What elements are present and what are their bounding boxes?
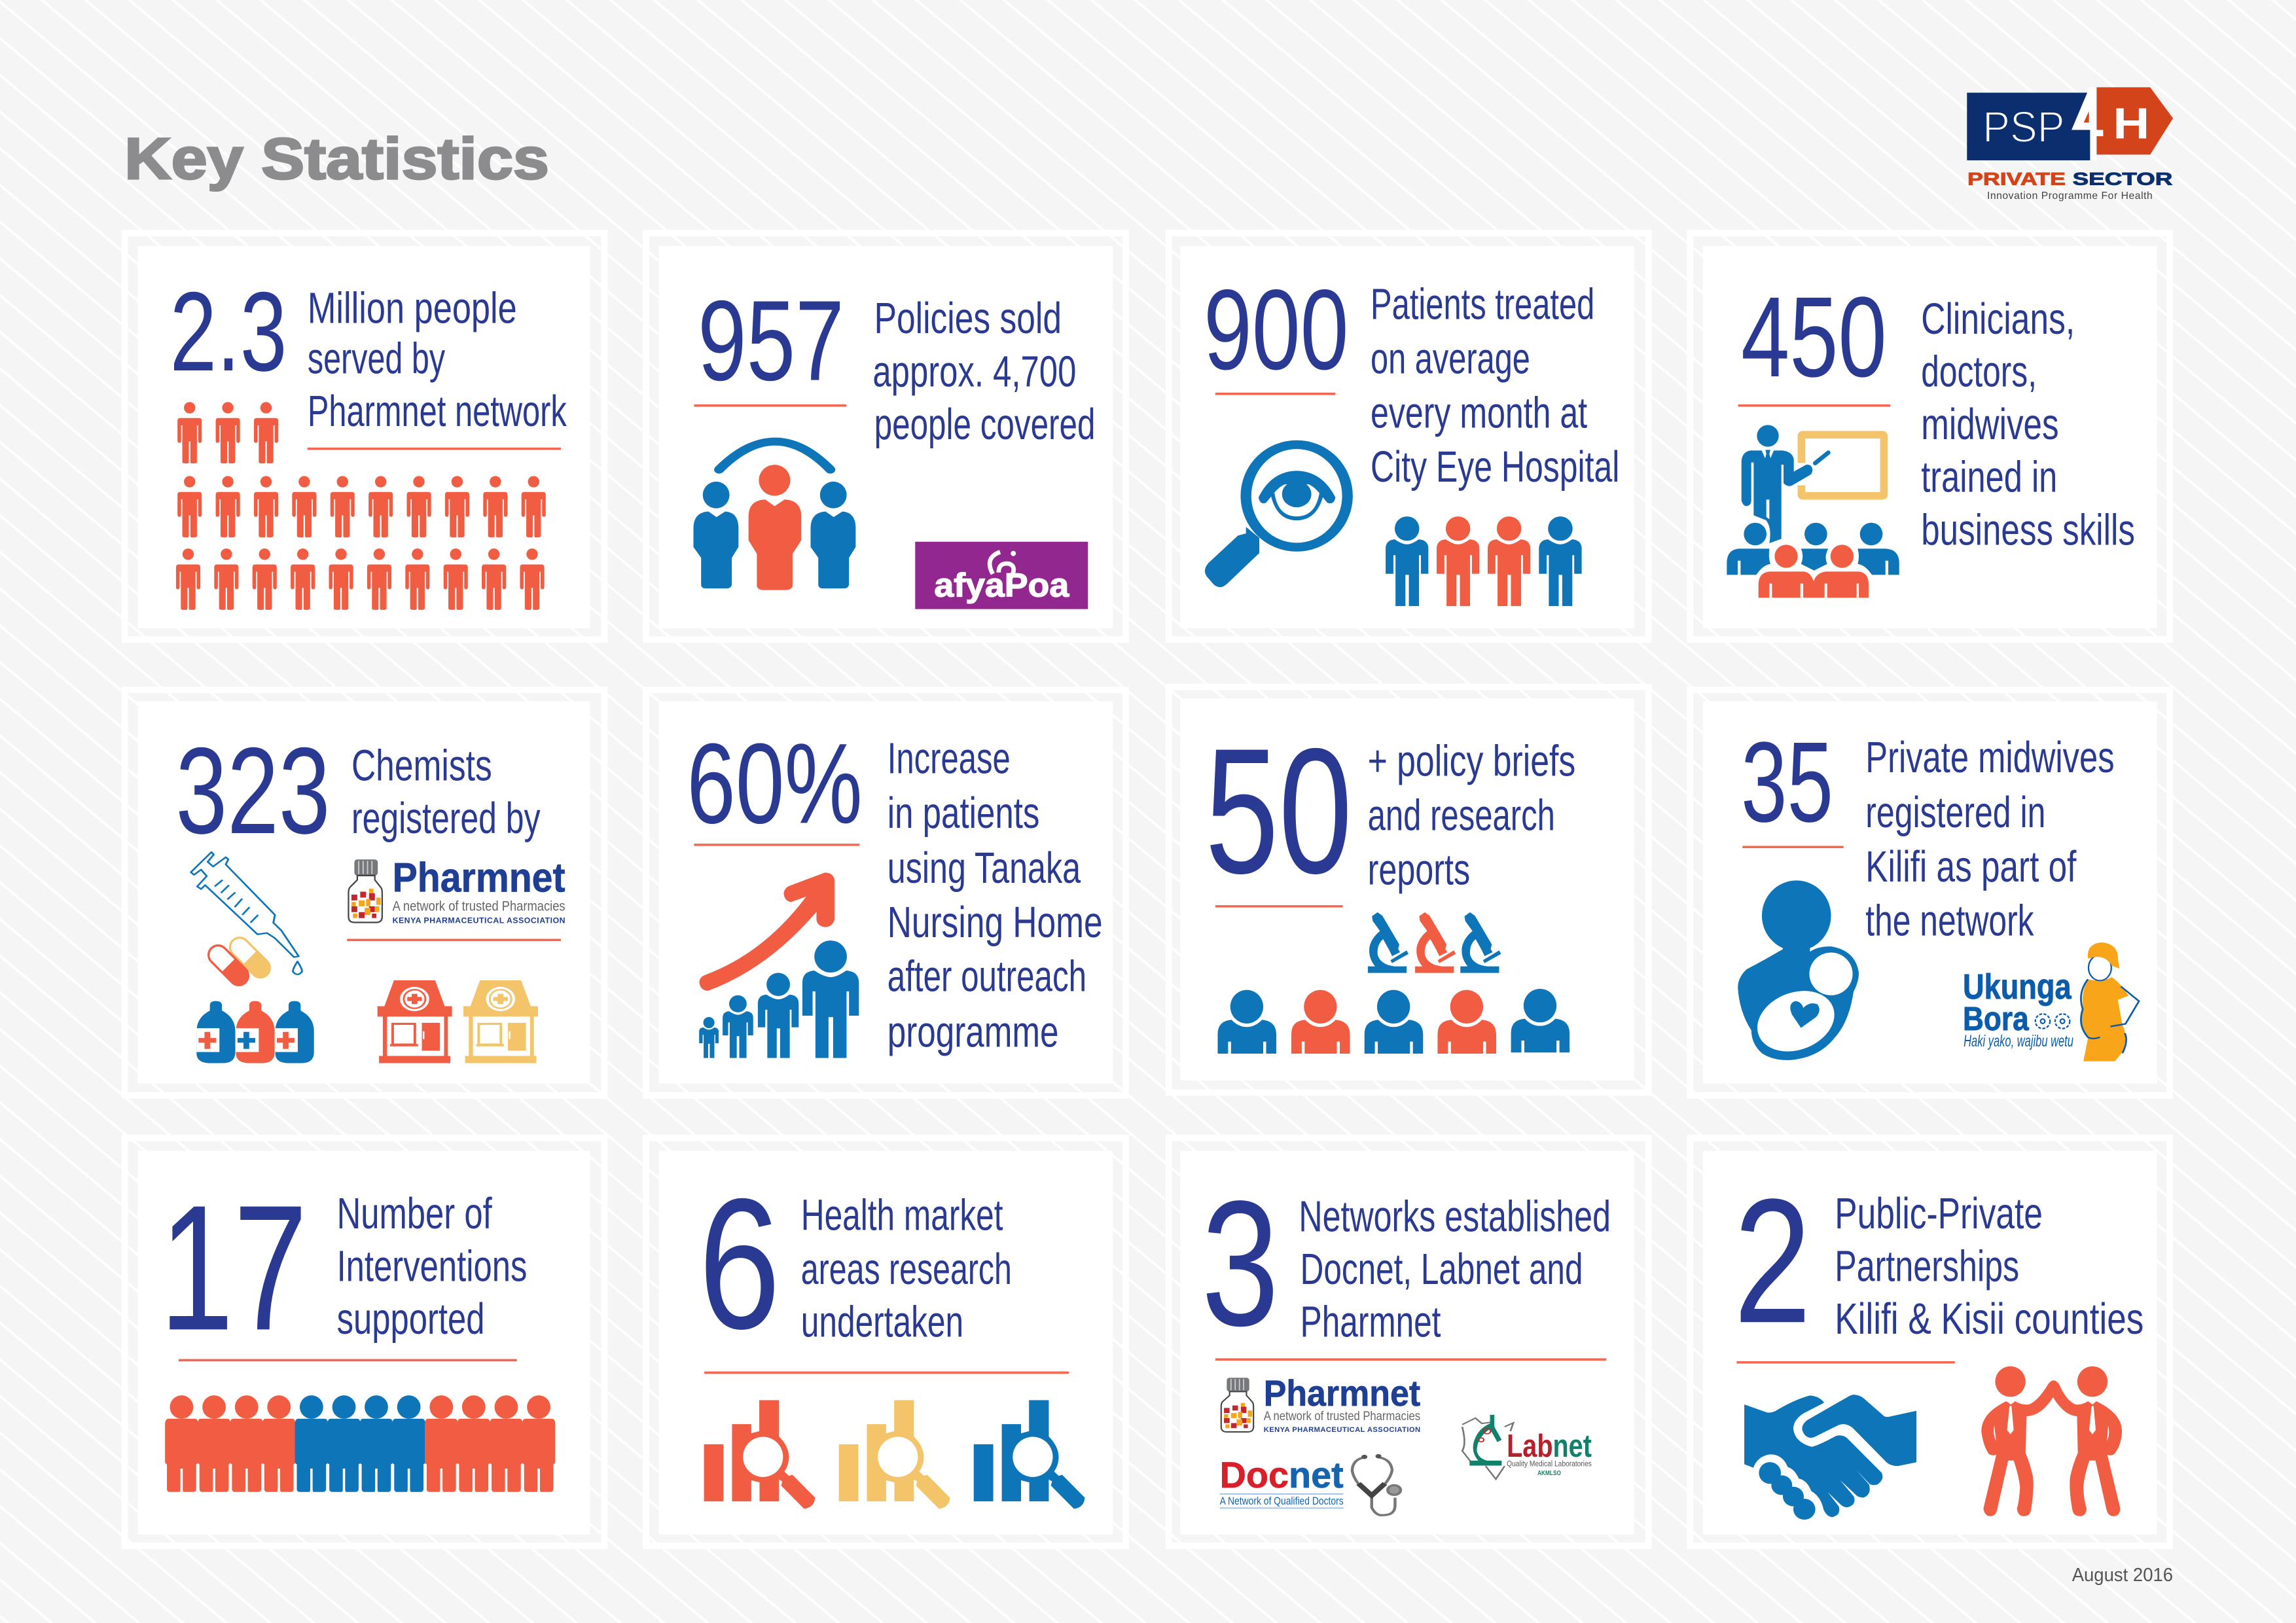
text block: Million people [308, 283, 517, 332]
logo: Ukunga Bora: Haki yako, wajibu wetu [1964, 1033, 2073, 1050]
text block [1835, 1189, 2144, 1344]
text block [1921, 294, 2135, 554]
text block: using Tanaka [888, 844, 1081, 893]
icon: syringe [191, 852, 302, 974]
text block: served by [308, 334, 445, 383]
logo: PSP4H: H [2113, 99, 2149, 149]
logo: afyaPoa [915, 542, 1088, 609]
logo: Pharmnet: Pharmnet [393, 855, 565, 901]
text block: Policies sold [874, 294, 1062, 343]
text block: registered by [351, 794, 541, 843]
text block: + policy briefs [1368, 737, 1575, 786]
panel: 6 health market [646, 1138, 1126, 1546]
panel: 450 clinicians [1690, 233, 2170, 639]
panel: 50 policy briefs [1169, 687, 1649, 1092]
text block: Health market [801, 1190, 1003, 1240]
icon: two men with joined hands [1981, 1366, 2122, 1516]
logo: PSP4H: PSP [1982, 103, 2065, 152]
number: 17 [160, 1168, 308, 1367]
text block: registered in [1865, 788, 2045, 837]
text block [872, 294, 1095, 449]
text block: trained in [1921, 453, 2057, 502]
text block [801, 1190, 1012, 1347]
text block: Nursing Home [888, 898, 1103, 947]
icon: trainer with audience [1727, 425, 1899, 597]
logo: Pharmnet [348, 855, 565, 925]
text block: Number of [337, 1189, 492, 1238]
text block: Pharmnet [1300, 1298, 1441, 1347]
title: Key Statistics [124, 126, 549, 191]
text block: business skills [1921, 505, 2135, 554]
number: 450 [1741, 273, 1887, 401]
logo: Pharmnet: Pharmnet [1264, 1372, 1420, 1414]
text block: after outreach [888, 952, 1086, 1001]
number: 6 [698, 1160, 780, 1368]
text block [1368, 737, 1575, 894]
text block: Public-Private [1835, 1189, 2043, 1238]
text block: Private midwives [1865, 733, 2115, 782]
text block: City Eye Hospital [1371, 442, 1619, 491]
text block: the network [1865, 897, 2034, 946]
text block: programme [888, 1008, 1059, 1057]
text block [351, 741, 541, 843]
panel: 17 interventions [125, 1138, 605, 1546]
text block: approx. 4,700 [872, 348, 1076, 397]
icon: mother and baby [1738, 880, 1859, 1063]
text block [1299, 1192, 1611, 1347]
text block: reports [1368, 845, 1470, 894]
text block: Increase [888, 734, 1011, 783]
logo: Pharmnet: KENYA PHARMACEUTICAL ASSOCIATION [393, 916, 565, 925]
text block [308, 283, 567, 436]
logo: PSP4H: PRIVATE [1967, 169, 2066, 188]
logo: Pharmnet: KENYA PHARMACEUTICAL ASSOCIATION [1264, 1426, 1420, 1434]
text block: Chemists [351, 741, 492, 790]
logo: Labnet: Labnet [1507, 1428, 1592, 1464]
icon: chart with magnifier [704, 1400, 1085, 1509]
number: 60% [687, 719, 863, 847]
text block: Kilifi as part of [1865, 842, 2077, 891]
text block: Patients treated [1371, 280, 1594, 329]
text block: supported [337, 1294, 485, 1344]
logo: Docnet: Docnet [1220, 1454, 1344, 1495]
icon: handshake [1744, 1395, 1916, 1520]
logo: Ukunga Bora: Ukunga [1963, 967, 2072, 1007]
text block: Networks established [1299, 1192, 1611, 1241]
text block: in patients [888, 789, 1039, 838]
text block: Clinicians, [1921, 294, 2075, 344]
panel: 323 chemists [125, 690, 605, 1096]
text block: areas research [801, 1245, 1012, 1294]
number: 323 [175, 722, 330, 859]
text block: Interventions [337, 1242, 527, 1291]
logo: Labnet [1462, 1415, 1592, 1479]
icon: grid of people [176, 402, 546, 610]
text block: Pharmnet network [308, 387, 567, 436]
number: 957 [698, 277, 844, 404]
logo: Labnet: Quality Medical Laboratories [1507, 1459, 1592, 1469]
icon: four people [1386, 516, 1582, 606]
icon: medicine bottles [196, 1001, 314, 1063]
date: August 2016 [2072, 1565, 2173, 1586]
text block [1865, 733, 2115, 946]
panel: 60% increase [646, 690, 1126, 1096]
text block: people covered [874, 400, 1095, 449]
number: 35 [1741, 718, 1833, 846]
panel: 35 private midwives [1690, 690, 2170, 1096]
logo: Ukunga Bora [1963, 942, 2139, 1061]
logo: PSP4H [1967, 87, 2173, 202]
text block: Partnerships [1835, 1242, 2019, 1291]
icon: magnifier with eye [1205, 444, 1348, 587]
number: 2.3 [170, 268, 287, 395]
logo: PSP4H: Innovation Programme For Health [1987, 190, 2153, 202]
text block [337, 1189, 527, 1344]
panel: 957 policies sold [646, 233, 1126, 639]
text block: undertaken [801, 1298, 963, 1347]
text block: midwives [1921, 400, 2059, 449]
text block: Docnet, Labnet and [1300, 1245, 1583, 1294]
panel: 2 public-private partnerships [1690, 1138, 2170, 1546]
logo: Pharmnet: A network of trusted Pharmacies [1264, 1410, 1420, 1423]
text block: and research [1368, 791, 1555, 840]
icon: microscopes [1368, 912, 1501, 973]
logo: Labnet: AKMLSO [1537, 1470, 1561, 1477]
panel: 2.3 million people [125, 233, 605, 639]
text block: Kilifi & Kisii counties [1835, 1294, 2144, 1344]
logo: Ukunga Bora: Bora [1963, 999, 2029, 1037]
number: 3 [1202, 1164, 1279, 1363]
text block [1371, 280, 1619, 491]
logo: Pharmnet [1221, 1372, 1420, 1434]
logo: Docnet: A Network of Qualified Doctors [1220, 1495, 1344, 1507]
logo: afyaPoa: afyaPoa [934, 566, 1069, 604]
number: 2 [1734, 1162, 1811, 1360]
panel: 900 patients treated [1169, 233, 1649, 639]
icon: five people [1217, 989, 1570, 1054]
logo: PSP4H: SECTOR [2073, 169, 2172, 188]
logo: Pharmnet: A network of trusted Pharmacies [393, 899, 565, 914]
logo: Docnet [1220, 1454, 1401, 1515]
icon: pharmacy shops [378, 980, 538, 1063]
icon: pills [205, 934, 274, 989]
icon: three people covered [693, 442, 855, 590]
text block [888, 734, 1103, 1057]
panel: 3 networks [1169, 1138, 1649, 1546]
text block: doctors, [1921, 348, 2037, 397]
icon: growth arrow with people [699, 872, 859, 1058]
icon: row of people [165, 1395, 555, 1492]
number: 900 [1204, 266, 1349, 393]
number: 50 [1205, 711, 1352, 910]
text block: on average [1371, 334, 1530, 383]
text block: every month at [1371, 388, 1587, 437]
